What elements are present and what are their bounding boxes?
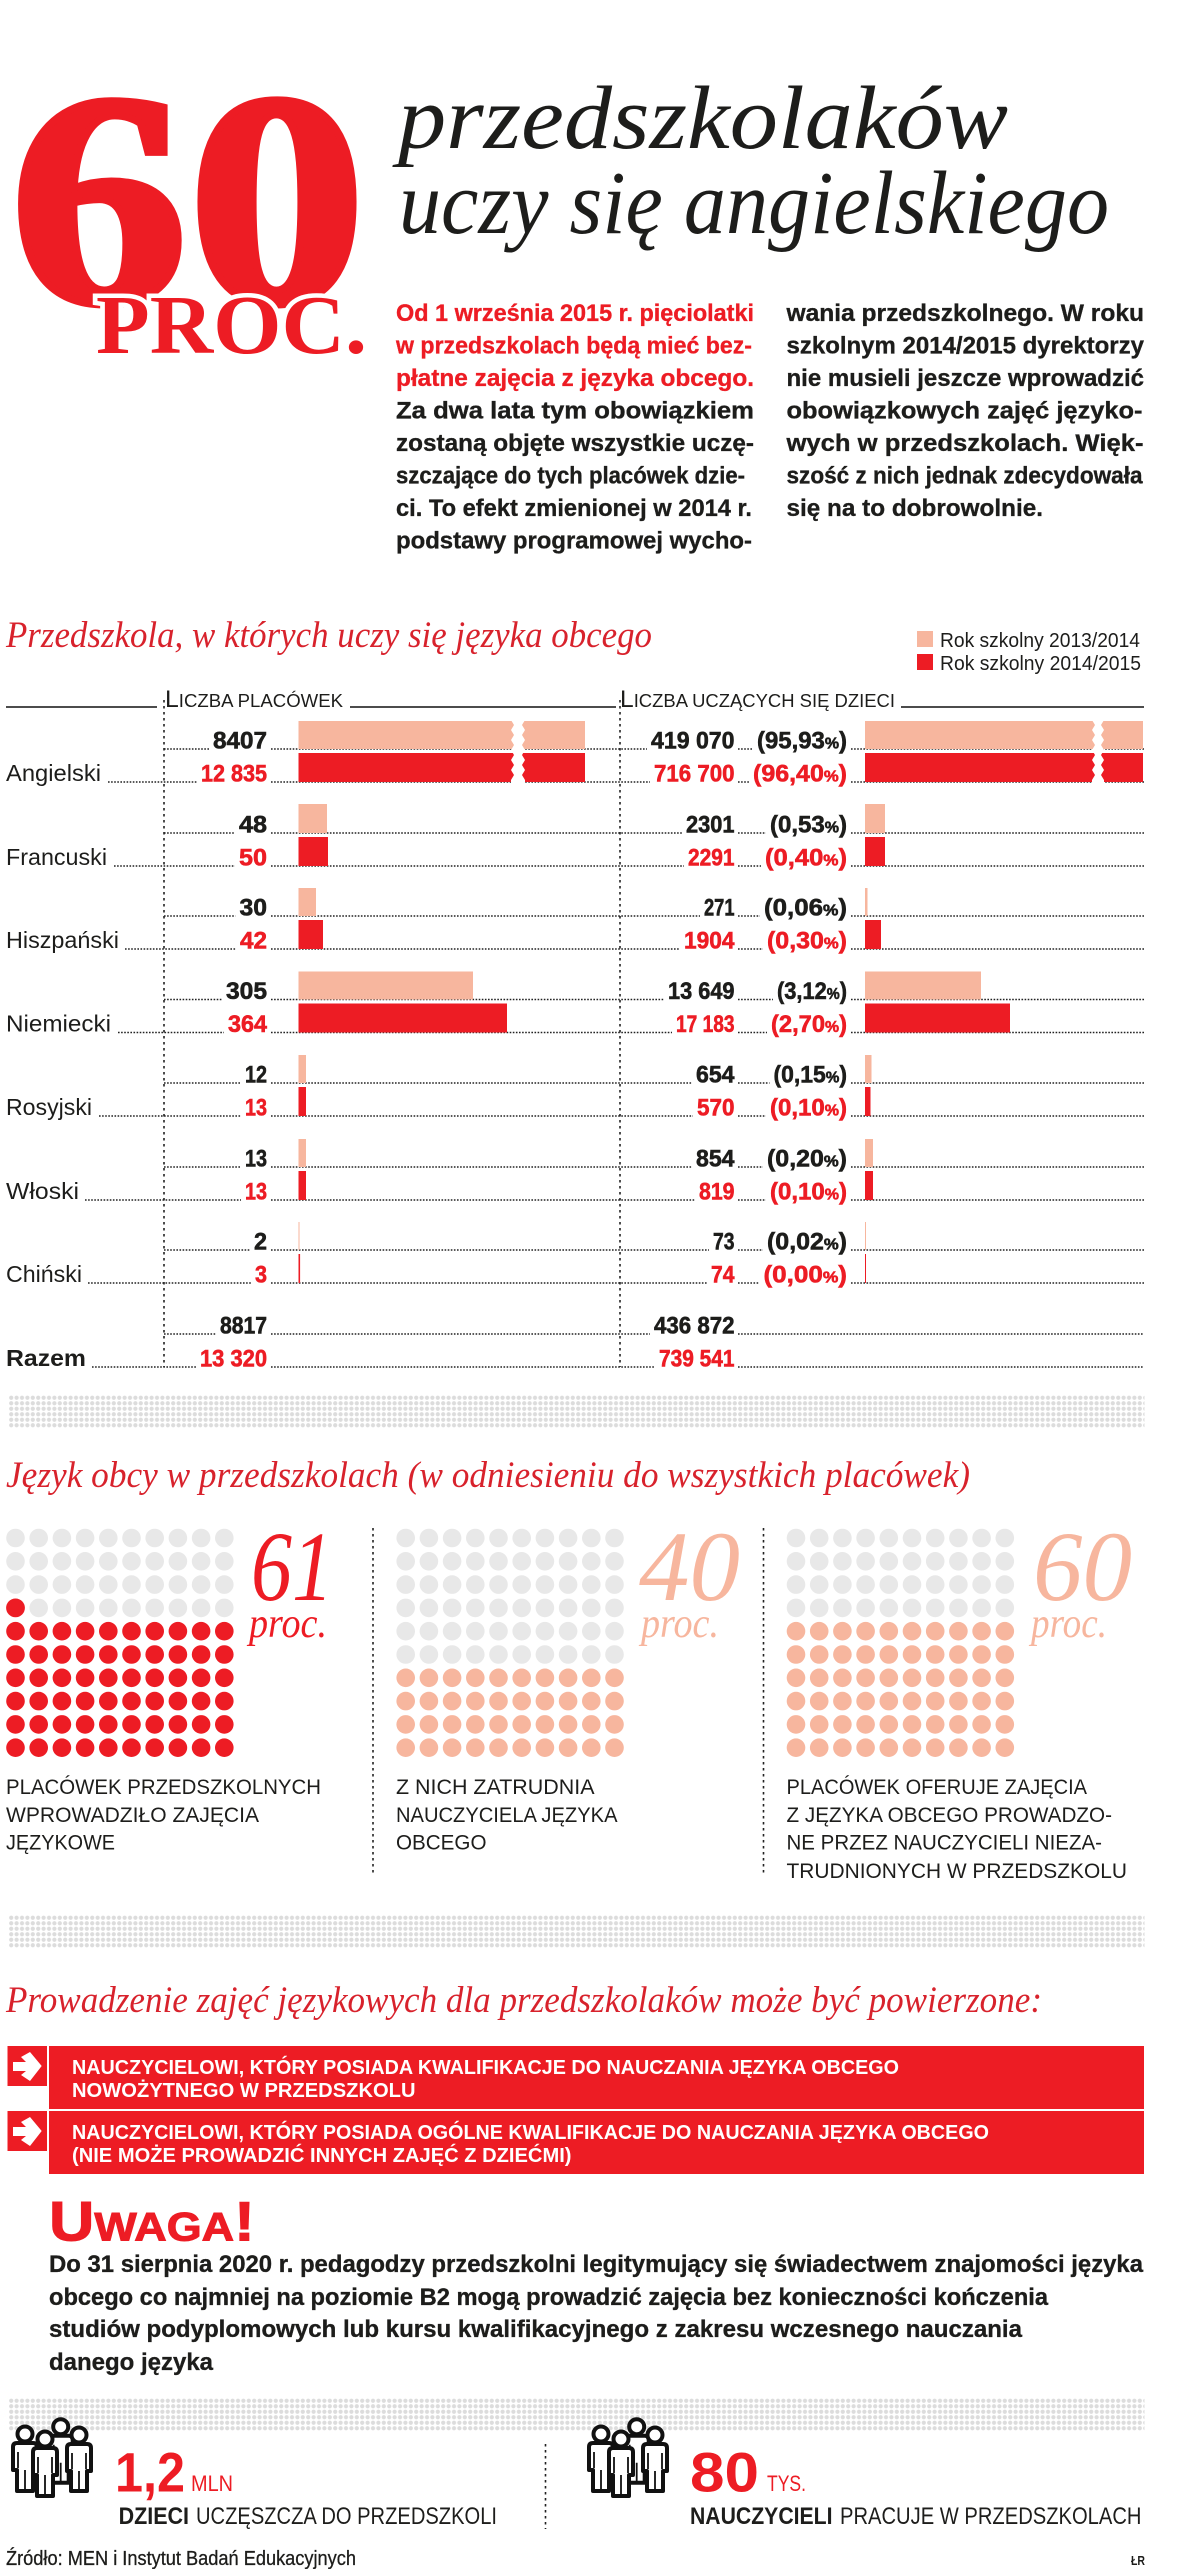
stat: teachers: PRACUJE W PRZEDSZKOLACH: [840, 2503, 1142, 2530]
chart row: Francuski: 50: [239, 844, 267, 872]
legend: Rok szkolny 2014/2015: [940, 653, 1141, 675]
chart row: Razem: 739 541: [659, 1346, 734, 1372]
intro text column 1: Od 1 września 2015 r. pięciolatki: [396, 300, 754, 327]
chart row: Niemiecki: (2,70%): [771, 1011, 847, 1038]
panel: 61 percent: JĘZYKOWE: [6, 1832, 115, 1854]
panel: 40 percent: NAUCZYCIELA JĘZYKA: [396, 1804, 618, 1827]
chart row: Niemiecki: [6, 972, 1144, 1038]
intro text column 2: się na to dobrowolnie.: [786, 495, 1043, 522]
chart row: Włoski: 13: [245, 1146, 267, 1172]
chart row: Włoski: 819: [699, 1178, 734, 1206]
intro text column 2: wych w przedszkolach. Więk-: [785, 430, 1144, 457]
intro text column 1: płatne zajęcia z języka obcego.: [396, 365, 754, 392]
title: uczy się angielskiego: [399, 154, 1109, 253]
chart row: Rosyjski: Rosyjski: [6, 1094, 92, 1120]
chart row: Hiszpański: (0,06 %): [764, 894, 847, 922]
chart row: Rosyjski: (0,10%): [770, 1094, 847, 1122]
stat: teachers: TYS.: [767, 2471, 806, 2496]
heading: share of preschools: Język obcy w przedszkolach (w odniesieniu do wszystkich placówek): [6, 1455, 970, 1496]
legend: [917, 630, 1141, 675]
intro text column 1: ci. To efekt zmienionej w 2014 r.: [396, 495, 752, 522]
intro text column 1: szczające do tych placówek dzie-: [396, 462, 745, 490]
callout: Uwaga: [49, 2190, 1144, 2376]
option box 2: [8, 2111, 1144, 2174]
chart row: Angielski: (95,93%): [757, 728, 847, 754]
chart row: Hiszpański: 30: [240, 894, 267, 922]
chart row: Francuski: 48: [239, 812, 267, 838]
heading: who can teach: Prowadzenie zajęć językowych dla przedszkolaków może być powierzone:: [5, 1980, 1042, 2021]
panel: 40 percent: OBCEGO: [396, 1832, 486, 1854]
chart row: Włoski: (0,10%): [770, 1178, 847, 1206]
chart row: Hiszpański: (0,30%): [767, 928, 847, 954]
panel: 40 percent: Z NICH ZATRUDNIA: [396, 1776, 594, 1799]
panel: 61 percent: WPROWADZIŁO ZAJĘCIA: [6, 1804, 259, 1827]
stat: children: UCZĘSZCZA DO PRZEDSZKOLI: [196, 2503, 497, 2530]
chart row: Rosyjski: [6, 1055, 1144, 1122]
chart row: Francuski: [6, 804, 1144, 872]
chart column headers: LICZBA PLACÓWEK: [165, 686, 343, 713]
chart row: Angielski: 419 070: [651, 728, 734, 754]
chart row: Razem: [6, 1312, 1144, 1372]
callout: Uwaga: obcego co najmniej na poziomie B2 mogą prowadzić zajęcia bez konieczności kończenia: [49, 2284, 1049, 2311]
chart row: Chiński: Chiński: [6, 1261, 82, 1287]
option box 1: [8, 2046, 1144, 2109]
chart row: Rosyjski: 654: [696, 1062, 735, 1088]
panel: 40 percent: proc.: [638, 1601, 719, 1647]
chart row: Niemiecki: 305: [226, 978, 267, 1005]
chart row: Włoski: 13: [245, 1178, 267, 1206]
option box 2: NAUCZYCIELOWI, KTÓRY POSIADA OGÓLNE KWALIFIKACJE DO NAUCZANIA JĘZYKA OBCEGO: [72, 2120, 989, 2144]
intro text column 1: w przedszkolach będą mieć bez-: [395, 332, 752, 360]
stat: children: 1,2: [115, 2440, 185, 2504]
chart row: Hiszpański: [6, 888, 1144, 954]
chart row: Niemiecki: 17 183: [676, 1011, 734, 1038]
icon: arrow: [13, 2117, 42, 2146]
chart row: Niemiecki: 364: [228, 1011, 268, 1038]
chart row: Hiszpański: Hiszpański: [6, 927, 119, 953]
panel: 61 percent: 61: [251, 1511, 333, 1622]
chart row: Włoski: Włoski: [6, 1178, 79, 1204]
author initials: ŁR: [1131, 2553, 1145, 2568]
stat: children: MLN: [191, 2471, 233, 2496]
option box 1: NOWOŻYTNEGO W PRZEDSZKOLU: [72, 2079, 416, 2102]
intro text column 2: nie musieli jeszcze wprowadzić: [786, 365, 1144, 392]
chart row: Angielski: 12 835: [201, 760, 267, 788]
chart row: Razem: 8817: [220, 1312, 267, 1340]
chart row: Chiński: 2: [254, 1228, 267, 1256]
intro text column 2: wania przedszkolnego. W roku: [785, 300, 1144, 327]
intro text column 1: [395, 300, 754, 554]
headline number: 60 proc.: 60: [10, 31, 366, 368]
panel: 61 percent: [6, 1511, 333, 1854]
option box 2: (NIE MOŻE PROWADZIĆ INNYCH ZAJĘĆ Z DZIEĆMI): [72, 2143, 572, 2167]
chart row: Hiszpański: 1904: [684, 928, 735, 954]
intro text column 2: [785, 300, 1145, 522]
panel: 60 percent: [786, 1511, 1132, 1883]
chart row: Rosyjski: 570: [697, 1094, 734, 1122]
stat: teachers: 80: [690, 2440, 759, 2504]
chart row: Francuski: Francuski: [6, 844, 107, 870]
panel: 60 percent: NE PRZEZ NAUCZYCIELI NIEZA-: [786, 1832, 1102, 1854]
chart row: Chiński: (0,00 %): [764, 1262, 847, 1288]
panel: 60 percent: TRUDNIONYCH W PRZEDSZKOLU: [786, 1860, 1127, 1883]
intro text column 1: zostaną objęte wszystkie uczę-: [396, 430, 754, 457]
chart row: Rosyjski: (0,15%): [774, 1062, 847, 1088]
chart row: Chiński: [6, 1222, 1144, 1288]
stat: children: DZIECI: [119, 2503, 189, 2530]
panel: 60 percent: PLACÓWEK OFERUJE ZAJĘCIA: [786, 1776, 1087, 1799]
chart row: Angielski: Angielski: [6, 760, 101, 786]
chart row: Niemiecki: 13 649: [668, 978, 734, 1005]
chart row: Włoski: 854: [696, 1146, 735, 1172]
chart column headers: LICZBA UCZĄCYCH SIĘ DZIECI: [620, 686, 895, 713]
chart row: Razem: 436 872: [654, 1312, 734, 1340]
chart row: Niemiecki: (3,12%): [777, 978, 847, 1005]
chart row: Włoski: (0,20%): [767, 1146, 847, 1172]
panel: 40 percent: [396, 1511, 740, 1854]
chart row: Chiński: 74: [711, 1262, 735, 1288]
panel: 61 percent: proc.: [246, 1601, 327, 1647]
chart row: Chiński: 3: [255, 1262, 267, 1288]
intro text column 1: Za dwa lata tym obowiązkiem: [396, 398, 754, 424]
callout: Uwaga: studiów podyplomowych lub kursu kwalifikacyjnego z zakresu wczesnego nauczania: [49, 2316, 1023, 2343]
icon: people (teachers): [589, 2419, 667, 2496]
chart row: Razem: Razem: [6, 1345, 86, 1371]
chart row: Angielski: (96,40%): [753, 760, 847, 788]
intro text column 2: obowiązkowych zajęć języko-: [786, 398, 1143, 424]
title: [392, 69, 1109, 253]
chart row: Angielski: 716 700: [654, 760, 734, 788]
chart row: Francuski: (0,40%): [765, 844, 847, 872]
chart row: Chiński: (0,02%): [767, 1228, 847, 1256]
intro text column 1: podstawy programowej wycho-: [396, 528, 752, 554]
intro text column 2: szkolnym 2014/2015 dyrektorzy: [786, 332, 1145, 360]
callout: Uwaga: danego języka: [49, 2349, 214, 2376]
chart row: Hiszpański: 271: [704, 894, 734, 922]
panel: 40 percent: 40: [639, 1511, 740, 1622]
chart row: Angielski: [6, 720, 1144, 788]
chart row: Francuski: 2291: [688, 844, 734, 872]
panel: 60 percent: proc.: [1028, 1601, 1107, 1647]
panel: 61 percent: PLACÓWEK PRZEDSZKOLNYCH: [6, 1776, 321, 1799]
icon: people (children): [13, 2419, 91, 2496]
chart column headers: [6, 686, 1144, 1367]
intro text column 2: szość z nich jednak zdecydowała: [786, 462, 1143, 490]
panel: 60 percent: Z JĘZYKA OBCEGO PROWADZO-: [786, 1804, 1112, 1827]
heading: chart section: Przedszkola, w których uczy się języka obcego: [5, 615, 652, 656]
chart row: Włoski: [6, 1139, 1144, 1206]
stat: teachers: NAUCZYCIELI: [690, 2503, 832, 2530]
stat: teachers: [690, 2440, 1142, 2530]
chart row: Rosyjski: 12: [245, 1062, 267, 1088]
callout: Uwaga: Do 31 sierpnia 2020 r. pedagodzy przedszkolni legitymujący się świadectwem znajomości języka: [49, 2251, 1144, 2278]
callout: Uwaga: UWAGA !: [49, 2190, 255, 2252]
chart row: Razem: 13 320: [200, 1346, 267, 1372]
chart row: Niemiecki: Niemiecki: [6, 1010, 111, 1036]
chart row: Francuski: 2301: [686, 812, 734, 838]
chart row: Rosyjski: 13: [245, 1094, 267, 1122]
title: przedszkolaków: [392, 69, 1008, 168]
chart row: Francuski: (0,53%): [770, 812, 847, 838]
stat: children: [115, 2440, 497, 2530]
option box 1: NAUCZYCIELOWI, KTÓRY POSIADA KWALIFIKACJE DO NAUCZANIA JĘZYKA OBCEGO: [72, 2055, 899, 2079]
icon: arrow: [13, 2052, 42, 2081]
chart row: Angielski: 8407: [213, 728, 267, 754]
chart row: Hiszpański: 42: [240, 928, 267, 954]
panel: 60 percent: 60: [1033, 1511, 1132, 1622]
headline number: 60 proc.: PROC.: [96, 279, 367, 372]
chart row: Chiński: 73: [713, 1228, 734, 1256]
legend: Rok szkolny 2013/2014: [940, 630, 1140, 652]
